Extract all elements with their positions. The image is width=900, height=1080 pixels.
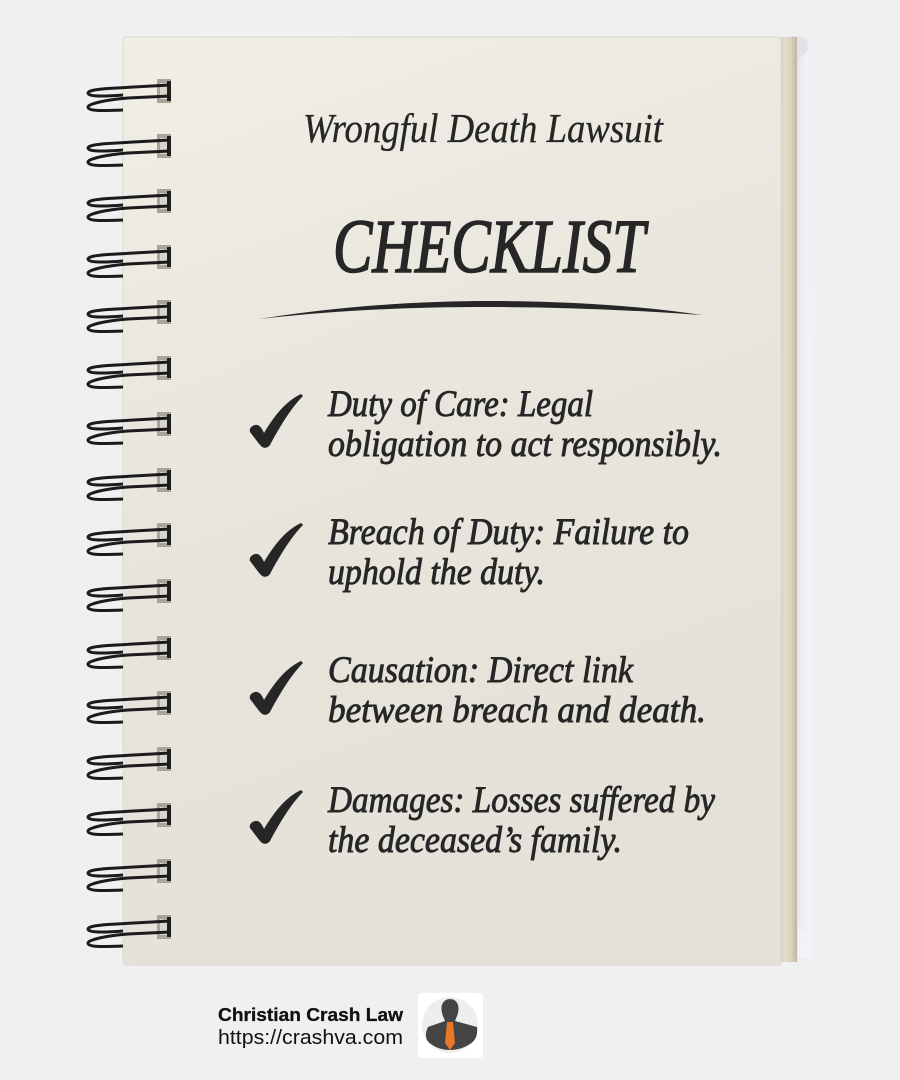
subtitle: Wrongful Death Lawsuit xyxy=(303,105,664,151)
notebook page xyxy=(123,37,781,965)
page edges xyxy=(778,37,797,962)
item text: Causation: Direct link xyxy=(328,650,634,691)
icon: check mark xyxy=(250,790,303,844)
item text: uphold the duty. xyxy=(328,552,545,593)
checklist item 1 xyxy=(250,384,722,465)
spiral binding xyxy=(88,79,171,947)
item text: obligation to act responsibly. xyxy=(328,424,722,465)
checklist item 4 xyxy=(250,780,716,861)
footer brand name: Christian Crash Law xyxy=(218,1004,404,1025)
item text: Damages: Losses suffered by xyxy=(327,780,716,821)
checklist item 2 xyxy=(250,512,689,593)
logo: lawyer avatar xyxy=(418,993,483,1058)
item text: Breach of Duty: Failure to xyxy=(328,512,689,553)
checklist item 3 xyxy=(250,650,706,731)
underline swoosh xyxy=(259,301,702,319)
item text: the deceased’s family. xyxy=(328,820,622,861)
icon: check mark xyxy=(250,661,303,715)
footer url: https://crashva.com xyxy=(218,1027,403,1049)
item text: between breach and death. xyxy=(328,690,706,731)
icon: check mark xyxy=(250,523,303,577)
heading: CHECKLIST xyxy=(333,205,649,289)
item text: Duty of Care: Legal xyxy=(327,384,593,425)
icon: check mark xyxy=(250,394,303,448)
back cover xyxy=(792,36,812,961)
